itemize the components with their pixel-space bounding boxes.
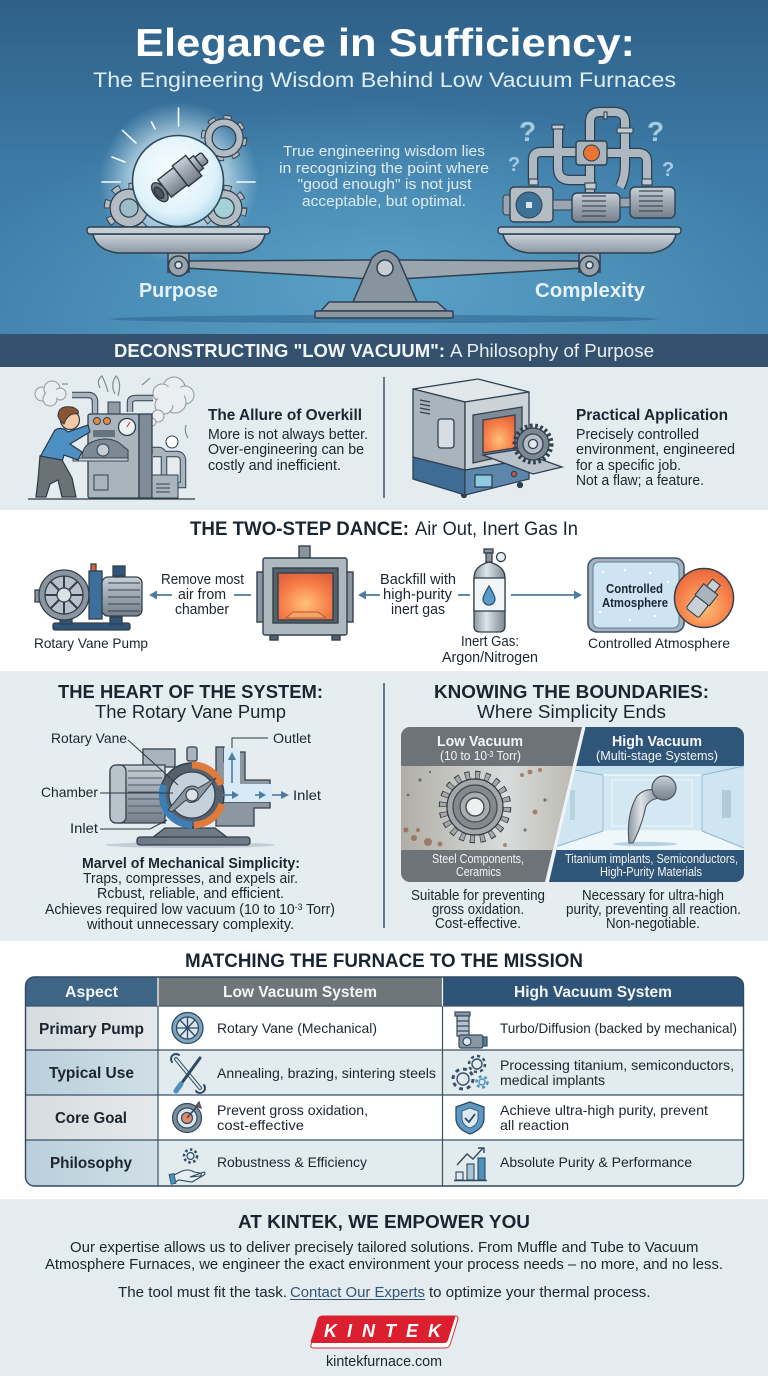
text: high vacuum summary: purity, preventing all reaction. [566,902,741,918]
icon: furnace with gear [413,379,562,498]
text: backfill [380,572,456,618]
text: backfill: high-purity [383,587,453,603]
text: body [45,1240,723,1273]
icon: gears [453,1056,488,1089]
icon: complex pump and pipes: ? [508,154,520,176]
high vacuum column text: Absolute Purity & Performance [500,1154,692,1170]
text: practical application: for a specific job. [576,458,681,474]
text: marvel of mechanical simplicity: -3 [295,902,302,912]
label: rotary vane pump: Rotary Vane Pump [34,635,148,651]
comparison panel: low versus high vacuum: (10 to 10 [440,748,491,763]
icon: gear in hand [169,1150,205,1184]
subtitle: The Engineering Wisdom Behind Low Vacuum Furnaces [93,68,676,92]
quote text: in recognizing the point where [279,161,489,177]
icon: controlled atmosphere chamber [588,558,734,632]
text: remove most air [161,572,244,618]
part inside sphere [147,147,213,206]
heading: knowing the boundaries: KNOWING THE BOUNDARIES: [434,681,709,702]
text: low vacuum summary: gross oxidation. [432,902,524,918]
low vacuum column text: Annealing, brazing, sintering steels [217,1065,436,1081]
low vacuum column text: cost-effective [217,1117,304,1133]
text: high vacuum summary [566,888,741,932]
heading: matching the furnace: MATCHING THE FURNACE TO THE MISSION [185,951,583,972]
banner heading: deconstructing low vacuum: A Philosophy of Purpose [450,341,654,361]
label: inert gas: Argon/Nitrogen [442,650,538,666]
table [25,977,744,1186]
high vacuum side [544,727,744,882]
icon: shield check [456,1102,484,1134]
table row labels: Core Goal [55,1110,127,1127]
label: inert gas: Inert Gas: [461,634,519,650]
logo: kintek: KINTEK [324,1321,443,1341]
text: marvel of mechanical simplicity: Torr) [302,902,335,918]
quote text: True engineering wisdom lies [283,144,485,160]
heading: two-step dance: THE TWO-STEP DANCE: [190,519,409,540]
diagram: rotary vane pump cutaway [100,738,289,848]
text: marvel of mechanical simplicity: Marvel of Mechanical Simplicity: [82,856,300,872]
table row labels: Primary Pump [39,1021,144,1038]
high vacuum column text: Turbo/Diffusion (backed by mechanical) [500,1020,737,1036]
low vacuum column text: Prevent gross oxidation, [217,1102,368,1118]
text: marvel of mechanical simplicity: without unnecessary complexity. [86,917,294,933]
high vacuum column text [500,1020,737,1170]
text: low vacuum summary [411,888,545,932]
table row labels [39,1021,144,1172]
text: body: Our expertise allows us to deliver precisely tailored solutions. From Muffle and Tube to Vacuum [70,1240,698,1256]
icon: turbo pump [455,1012,487,1048]
icon: target with dart [172,1102,202,1132]
low vacuum side [401,727,591,882]
icon: furnace chamber [257,546,353,640]
text: call to action: The tool must fit the task. [118,1285,287,1301]
table header text: High Vacuum System [514,984,672,1001]
icon: glowing sphere with part and gears [99,102,259,262]
heading: heart of the system: THE HEART OF THE SYSTEM: [58,681,323,702]
text: backfill: Backfill with [380,572,456,588]
text: marvel of mechanical simplicity: Achieves required low vacuum (10 to 10 [45,902,303,918]
text: body: Atmosphere Furnaces, we engineer the exact environment your process needs – no more, and no less. [45,1257,723,1273]
heading: heart of the system [58,681,323,722]
text: marvel of mechanical simplicity: Rcbust, reliable, and efficient. [97,886,284,902]
text: high vacuum summary: Necessary for ultra-high [582,888,724,904]
text: practical application: Not a flaw; a feature. [576,473,704,489]
label: controlled atmosphere: Controlled Atmosphere [588,635,730,651]
text: practical application: Practical Application [576,407,728,424]
text: website: kintekfurnace.com [326,1354,442,1370]
icon: rotary vane pump [35,564,142,630]
icon: complex pump and pipes: ? [647,116,664,147]
text: low vacuum summary: Cost-effective. [435,916,521,932]
heading: at kintek: AT KINTEK, WE EMPOWER YOU [238,1212,530,1232]
text: call to action: to optimize your thermal process. [429,1285,650,1301]
label: purpose: Purpose [139,280,218,302]
text: remove most air: air from [178,587,226,603]
comparison panel: low versus high vacuum: High-Purity Materials [600,865,702,879]
comparison panel: low versus high vacuum: Torr) [493,748,521,763]
panel: heart and boundaries [0,671,768,941]
icon: balance scale [87,227,681,323]
comparison panel: low versus high vacuum: High Vacuum [612,733,702,750]
banner heading: deconstructing low vacuum: DECONSTRUCTING "LOW VACUUM": [114,341,445,361]
text: call to action: Contact Our Experts [290,1285,425,1301]
icon: vane wheel [172,1012,203,1044]
text: marvel of mechanical simplicity: Traps, compresses, and expels air. [83,871,298,887]
text: high vacuum summary: Non-negotiable. [606,916,700,932]
high vacuum column text: all reaction [500,1117,569,1133]
arrow: gas in [358,590,470,600]
panel: comparison table section [24,954,744,1187]
icon: rising chart [454,1148,487,1180]
quote text: "good enough" is not just [298,177,472,193]
logo: kintek [311,1316,458,1348]
gear: top right [204,118,244,158]
table header text: Low Vacuum System [223,984,377,1001]
heading: knowing the boundaries [434,681,709,722]
text: the allure of overkill [208,407,368,474]
icon: controlled atmosphere chamber: Atmosphere [602,596,668,610]
heading: heart of the system: The Rotary Vane Pump [95,701,286,722]
high vacuum column text: medical implants [500,1072,605,1088]
heading: two-step dance: Air Out, Inert Gas In [415,519,578,540]
icon: complex pump and pipes: ? [519,116,536,147]
text: practical application: environment, engineered [576,442,735,458]
label: complexity: Complexity [535,280,646,302]
comparison panel: low versus high vacuum: Titanium implants, Semiconductors, [565,852,738,866]
icon: wrench and screwdriver [171,1054,205,1093]
text: the allure of overkill: Over-engineering can be [208,442,364,458]
text: practical application [576,407,735,489]
table row labels: Typical Use [49,1065,134,1082]
icon: overkill machine with engineer [28,376,195,499]
text: backfill: inert gas [391,602,445,618]
comparison panel: low versus high vacuum: Low Vacuum [437,733,523,750]
table header text: Aspect [65,984,118,1001]
low vacuum column text [217,1020,436,1170]
text: low vacuum summary: Suitable for preventing [411,888,545,904]
arrow: air out [149,590,251,600]
labels: pump parts [41,730,321,836]
text: marvel of mechanical simplicity [45,856,335,933]
gear: bottom right [204,188,244,228]
labels: pump parts: Inlet [293,787,321,803]
comparison panel: low versus high vacuum: Steel Components, [432,852,524,866]
pump housing [216,747,270,826]
labels: pump parts: Rotary Vane [51,730,127,746]
labels: pump parts: Inlet [70,820,98,836]
icon: inert gas cylinder [474,549,506,632]
comparison panel: low versus high vacuum: Ceramics [456,865,501,879]
comparison panel: low versus high vacuum: -3 [487,750,494,759]
panel: two-step dance [0,510,768,671]
title: Elegance in Sufficiency: [135,22,635,65]
table row labels: Philosophy [50,1155,132,1172]
labels: pump parts: Chamber [41,784,98,800]
panel: footer [0,1199,768,1376]
text: call to action [118,1285,650,1301]
quote text [279,144,489,210]
low vacuum column text: Robustness & Efficiency [217,1154,367,1170]
high vacuum column text: Achieve ultra-high purity, prevent [500,1102,708,1118]
text: remove most air: chamber [175,602,229,618]
text: practical application: Precisely controlled [576,427,699,443]
arrow: to controlled atmosphere [511,590,582,600]
gear: bottom left [107,186,151,230]
high vacuum column text: Processing titanium, semiconductors, [500,1057,734,1073]
table header text [65,984,672,1001]
panel: hero header [0,0,768,334]
low vacuum column text: Rotary Vane (Mechanical) [217,1020,377,1036]
text: the allure of overkill: costly and inefficient. [208,458,341,474]
labels: pump parts: Outlet [273,730,311,746]
comparison panel: low versus high vacuum [401,727,744,882]
icon: complex pump and pipes [503,112,675,222]
icon: complex pump and pipes: ? [662,159,674,181]
heading: knowing the boundaries: Where Simplicity Ends [477,701,666,722]
text: remove most air: Remove most [161,572,244,588]
label: inert gas [442,634,538,666]
heading: two-step dance [190,519,578,540]
text: the allure of overkill: The Allure of Overkill [208,407,362,424]
panel: philosophy [0,367,768,510]
icon: controlled atmosphere chamber: Controlled [606,582,663,596]
text: the allure of overkill: More is not always better. [208,427,368,443]
quote text: acceptable, but optimal. [302,194,466,210]
comparison panel: low versus high vacuum: (Multi-stage Systems) [596,748,718,763]
banner heading: deconstructing low vacuum [0,334,768,367]
